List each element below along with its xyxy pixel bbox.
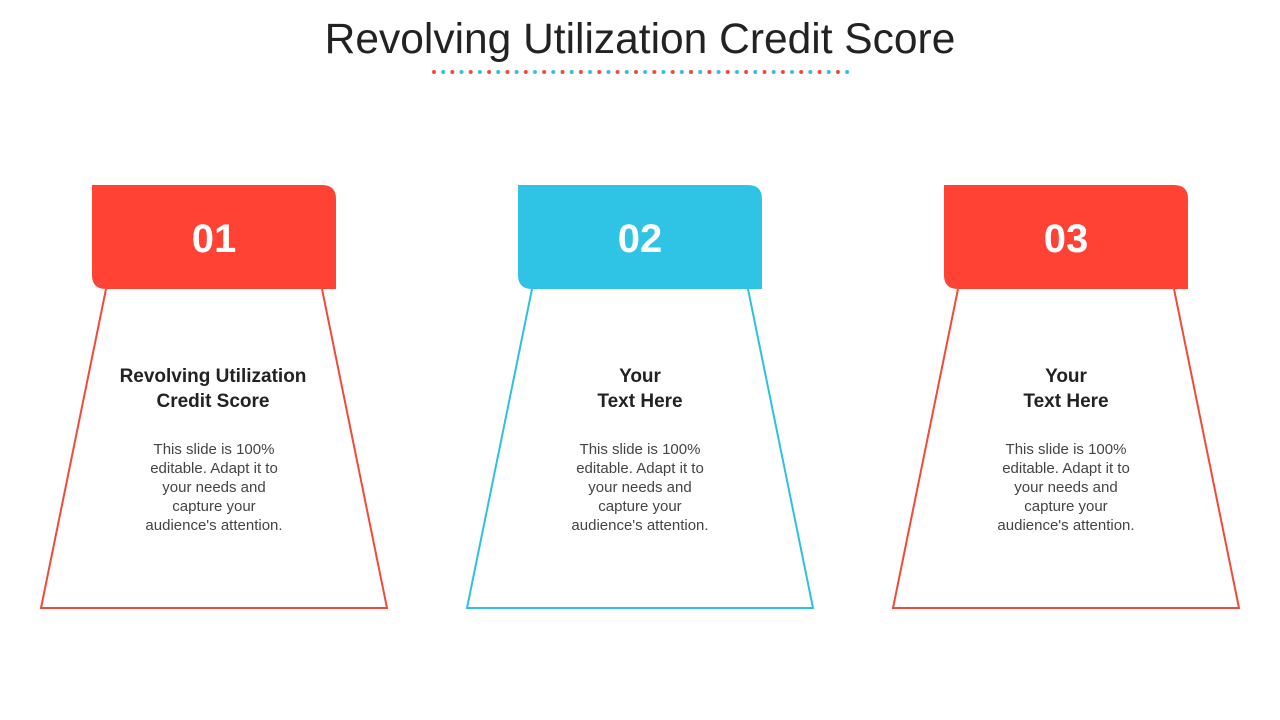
card 2 shape [467, 185, 813, 608]
heading 2: Text Here [597, 391, 683, 412]
heading 1: Revolving Utilization Credit Score [120, 366, 306, 412]
heading 3: Text Here [1023, 391, 1109, 412]
number 02: 02 [618, 217, 662, 261]
heading 3 [1023, 366, 1109, 412]
card 3 shape [893, 185, 1239, 608]
title: Revolving Utilization Credit Score [325, 16, 955, 63]
body 2: This slide is 100% editable. Adapt it to your needs and capture your audience's attention. [571, 441, 709, 534]
body 3: This slide is 100% editable. Adapt it to your needs and capture your audience's attention. [997, 441, 1135, 534]
heading 2: Your [619, 366, 661, 387]
number 01: 01 [192, 217, 236, 261]
heading 2 [597, 366, 683, 412]
card 1 shape [41, 185, 387, 608]
number 03: 03 [1044, 217, 1088, 261]
heading 3: Your [1045, 366, 1087, 387]
body 1: This slide is 100% editable. Adapt it to your needs and capture your audience's attention. [145, 441, 283, 534]
